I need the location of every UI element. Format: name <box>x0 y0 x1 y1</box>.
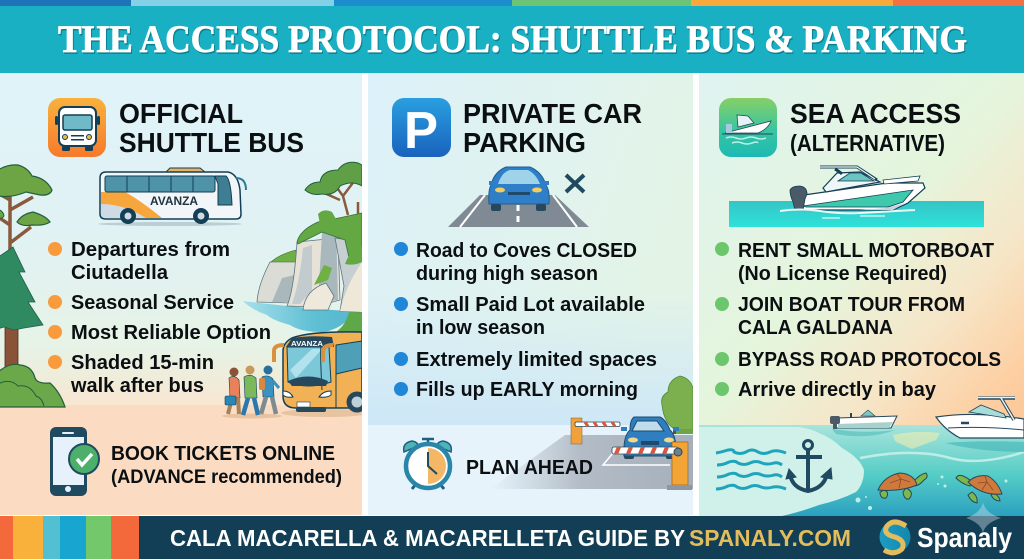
top colour strip <box>0 0 1024 7</box>
panel: sea access <box>693 73 1024 516</box>
logo: Spanaly <box>880 522 1012 553</box>
callout: book tickets: (ADVANCE recommended) <box>111 467 342 488</box>
illustration: front view coach <box>274 332 369 417</box>
heading: private car parking: PRIVATE CAR <box>463 98 642 129</box>
heading: official shuttle bus: SHUTTLE BUS <box>119 127 304 158</box>
illustration: parking lot barrier <box>490 376 693 490</box>
heading: private car parking: PARKING <box>463 127 586 158</box>
bullet list: parking: in low season <box>416 317 545 339</box>
bullet list: shuttle: Shaded 15-min <box>71 352 214 374</box>
bullet list: sea: BYPASS ROAD PROTOCOLS <box>738 349 1001 371</box>
footer colour blocks <box>0 516 139 559</box>
sea and shore <box>699 425 1024 516</box>
bullet list: shuttle: Most Reliable Option <box>71 322 271 344</box>
icon: boat tile <box>719 98 777 157</box>
title banner <box>0 6 1024 73</box>
icon: waves <box>716 450 786 489</box>
bubbles <box>856 476 1008 510</box>
illustration: travellers walking <box>222 366 282 418</box>
bullet list: sea: RENT SMALL MOTORBOAT <box>738 240 994 262</box>
bullet list: sea <box>715 240 1001 401</box>
panel: private car parking <box>362 73 693 516</box>
bullet list: parking: Extremely limited spaces <box>416 349 657 371</box>
footer credit text: SPANALY.COM <box>689 525 851 551</box>
icon: right turtle <box>956 475 1002 503</box>
icon: bus tile <box>48 98 106 157</box>
heading: official shuttle bus <box>120 104 303 152</box>
bullet list: parking <box>394 240 657 401</box>
divider <box>693 95 699 516</box>
callout: book tickets <box>111 443 342 488</box>
icon: alarm clock <box>404 439 451 489</box>
bullet list: parking: Small Paid Lot available <box>416 294 645 316</box>
heading: private car parking <box>464 104 642 152</box>
illustration: side view coach: AVANZA <box>150 196 198 208</box>
logo: Spanaly: Spanaly <box>917 522 1012 553</box>
bullet list: shuttle: Ciutadella <box>71 262 169 284</box>
icon: left turtle <box>878 473 927 499</box>
icon: anchor <box>786 440 832 491</box>
illustration: left pine trees <box>0 165 65 407</box>
bullet list: shuttle: Seasonal Service <box>71 292 234 314</box>
bullet list: parking: during high season <box>416 263 598 285</box>
bullet list: shuttle: walk after bus <box>70 375 204 397</box>
bullet list: shuttle <box>48 239 271 397</box>
callout: plan ahead: PLAN AHEAD <box>466 457 593 479</box>
illustration: front view coach: AVANZA <box>291 339 324 348</box>
bullet list: sea: Arrive directly in bay <box>738 379 937 401</box>
icon: sparkle <box>966 502 1001 533</box>
heading: sea access: SEA ACCESS <box>790 98 961 129</box>
illustration: small motorboat <box>830 410 897 429</box>
footer credit text: CALA MACARELLA & MACARELLETA GUIDE BY <box>170 525 685 551</box>
icon: phone with check <box>50 427 99 496</box>
heading: official shuttle bus: OFFICIAL <box>119 98 243 129</box>
icon: closed cross <box>566 175 584 192</box>
icon: parking tile <box>392 98 451 160</box>
footer bar <box>0 502 1024 559</box>
bullet list: parking: Road to Coves CLOSED <box>416 240 637 262</box>
illustration: motorboat on sea band <box>729 167 984 227</box>
callout: book tickets: BOOK TICKETS ONLINE <box>111 443 335 465</box>
bullet list: shuttle: Departures from <box>71 239 230 261</box>
divider <box>362 95 368 516</box>
bullet list: sea: (No License Required) <box>738 263 947 285</box>
bullet list: sea: JOIN BOAT TOUR FROM <box>738 294 965 316</box>
icon: parking tile: P <box>404 102 438 160</box>
illustration: cliffs and cove <box>243 162 362 332</box>
illustration: side view coach <box>98 168 246 226</box>
bullet list: sea: CALA GALDANA <box>738 317 893 339</box>
heading: sea access <box>790 104 960 156</box>
heading: sea access: (ALTERNATIVE) <box>790 130 945 156</box>
panel: official shuttle bus <box>0 73 369 515</box>
bullet list: parking: Fills up EARLY morning <box>416 379 638 401</box>
illustration: closed road with car <box>448 167 589 227</box>
illustration: large white boat <box>936 398 1024 438</box>
